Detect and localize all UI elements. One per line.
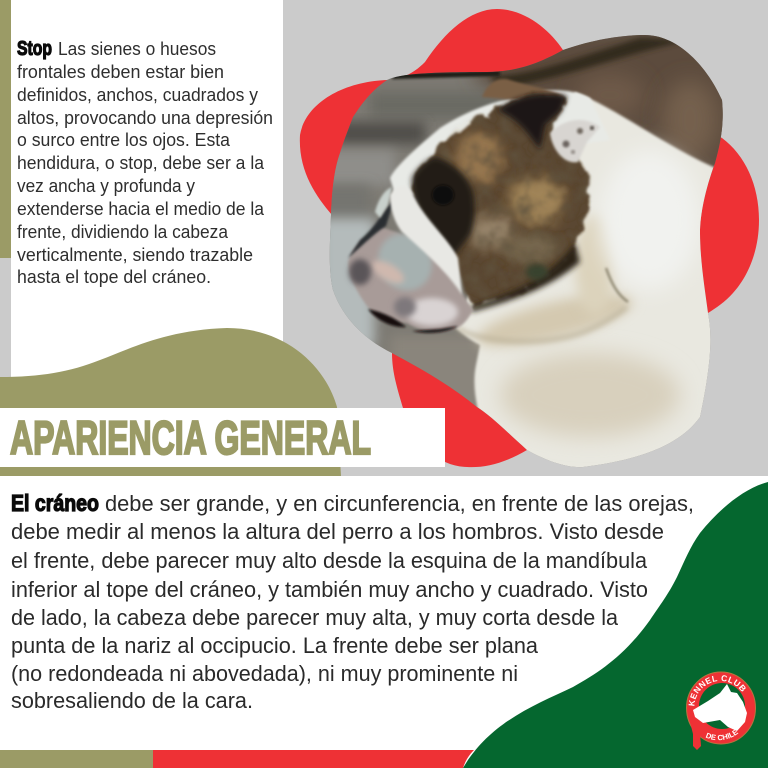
text block: stop description: hasta el tope del cráneo. [17, 267, 211, 287]
logo dog head [693, 684, 747, 731]
red blob behind photo [300, 9, 759, 467]
footer strip olive [0, 750, 153, 768]
dog head white blaze [390, 90, 610, 195]
white lower panel [0, 476, 768, 768]
text block: el cráneo [11, 490, 694, 713]
logo ribbon tag [690, 722, 701, 750]
dog back ear [482, 79, 565, 100]
title: APARIENCIA GENERAL [10, 411, 371, 464]
text block: stop description: Stop [17, 38, 52, 60]
text block: stop description: Las sienes o huesos [58, 39, 216, 59]
logo: Kennel Club de Chile [686, 672, 756, 750]
text block: el cráneo: punta de la nariz al occipucio. La frente debe ser plana [11, 633, 538, 658]
green corner wave [463, 482, 768, 768]
text block: stop description: frontales deben estar bien [17, 62, 224, 82]
text block: el cráneo: de lado, la cabeza debe parecer muy alta, y muy corta desde la [11, 605, 618, 630]
text block: stop description: definidos, anchos, cuadrados y [17, 85, 258, 105]
title band [0, 408, 445, 467]
dog white nose band [375, 186, 462, 295]
olive wave shape [0, 328, 341, 476]
text block: stop description: altos, provocando una depresión [17, 108, 273, 128]
text block: stop description: hendidura, o stop, debe ser a la [17, 153, 265, 173]
dog brindle patch [412, 93, 590, 312]
text block: stop description: extenderse hacia el medio de la [17, 199, 265, 219]
logo text top: KENNEL CLUB [688, 675, 746, 706]
dog body [452, 92, 725, 475]
text block: stop description: frente, dividiendo la cabeza [17, 222, 229, 242]
logo text bottom: DE CHILE [706, 730, 738, 740]
text block: stop description: o surco entre los ojos. Esta [17, 130, 231, 150]
text block: el cráneo: inferior al tope del cráneo, y también muy ancho y cuadrado. Visto [11, 577, 648, 602]
text block: el cráneo: debe medir al menos la altura del perro a los hombros. Visto desde [11, 519, 664, 544]
grey upper background [0, 0, 768, 476]
text block: stop description: verticalmente, siendo trazable [17, 245, 253, 265]
text block: stop description [17, 38, 273, 287]
photo background [330, 35, 723, 468]
footer strip red [153, 750, 474, 768]
olive side strip [0, 0, 11, 258]
text block: el cráneo: el frente, debe parecer muy alto desde la esquina de la mandíbula [11, 548, 647, 573]
text block: el cráneo: debe ser grande, y en circunferencia, en frente de las orejas, [105, 491, 694, 516]
text block: el cráneo: (no redondeada ni abovedada), ni muy prominente ni [11, 661, 518, 686]
dog ear [550, 120, 600, 162]
text block: el cráneo: sobresaliendo de la cara. [11, 688, 253, 713]
text block: el cráneo: El cráneo [11, 490, 99, 516]
photo: bulldog in profile [330, 35, 723, 468]
dog muzzle [348, 200, 473, 333]
panel: stop text [11, 0, 283, 380]
text block: stop description: vez ancha y profunda y [17, 176, 195, 196]
